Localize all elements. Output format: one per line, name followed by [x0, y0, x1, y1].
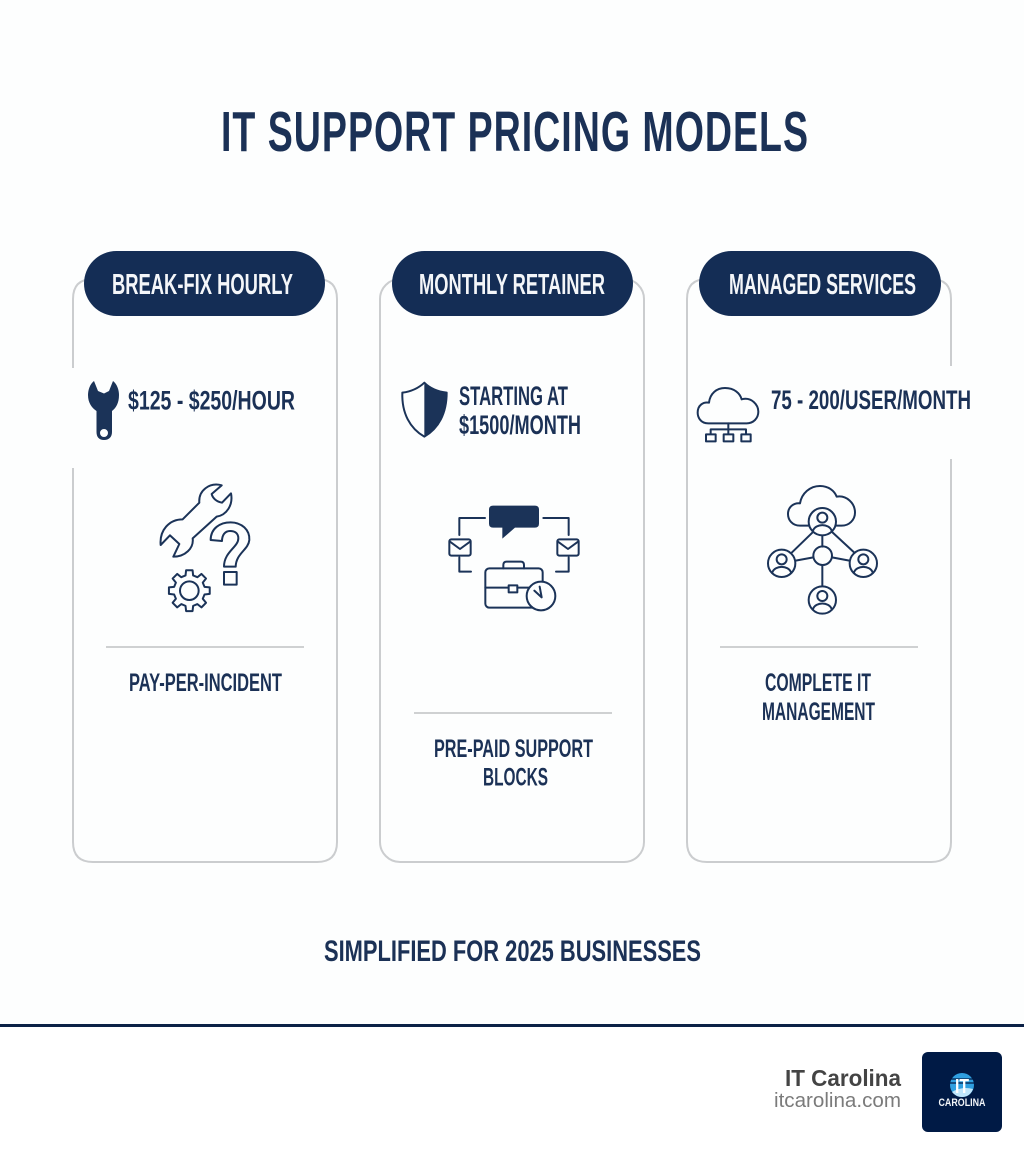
icon: support communication and briefcase	[449, 506, 579, 610]
icon: cloud with connected users	[768, 486, 877, 614]
description line two: BLOCKS	[483, 764, 548, 792]
icon: solid wrench	[88, 381, 119, 440]
footer bar	[0, 1024, 1024, 1027]
price: STARTING AT	[459, 381, 568, 411]
divider	[414, 712, 612, 714]
card outline	[687, 279, 951, 862]
divider	[106, 646, 304, 648]
description line two: MANAGEMENT	[762, 698, 875, 726]
pill heading	[84, 251, 325, 316]
panel: managed services	[687, 251, 971, 862]
price: $125 - $250/HOUR	[128, 386, 295, 416]
icon: cloud network	[698, 388, 758, 441]
brand url: itcarolina.com	[774, 1090, 901, 1112]
icon: shield	[402, 383, 447, 437]
description: PRE-PAID SUPPORT	[434, 735, 593, 763]
logo: CAROLINA	[938, 1097, 986, 1109]
brand name: IT Carolina	[785, 1065, 901, 1091]
logo: IT	[955, 1076, 969, 1098]
card outline	[73, 279, 337, 862]
pill heading: MONTHLY RETAINER	[419, 269, 605, 301]
tagline: SIMPLIFIED FOR 2025 BUSINESSES	[324, 935, 701, 968]
footer background	[0, 1027, 1024, 1154]
description: PAY-PER-INCIDENT	[129, 669, 282, 697]
divider	[720, 646, 918, 648]
pill heading	[392, 251, 633, 316]
card outline	[380, 279, 644, 862]
logo	[922, 1052, 1002, 1132]
pill heading	[699, 251, 941, 316]
description: COMPLETE IT	[765, 669, 871, 697]
panel: monthly retainer	[380, 251, 644, 862]
price amount: $1500/MONTH	[459, 410, 581, 440]
panel: break-fix hourly	[73, 251, 337, 862]
pill heading: MANAGED SERVICES	[729, 269, 916, 301]
icon: wrench, question mark and gear	[161, 485, 249, 611]
pill heading: BREAK-FIX HOURLY	[112, 269, 293, 301]
